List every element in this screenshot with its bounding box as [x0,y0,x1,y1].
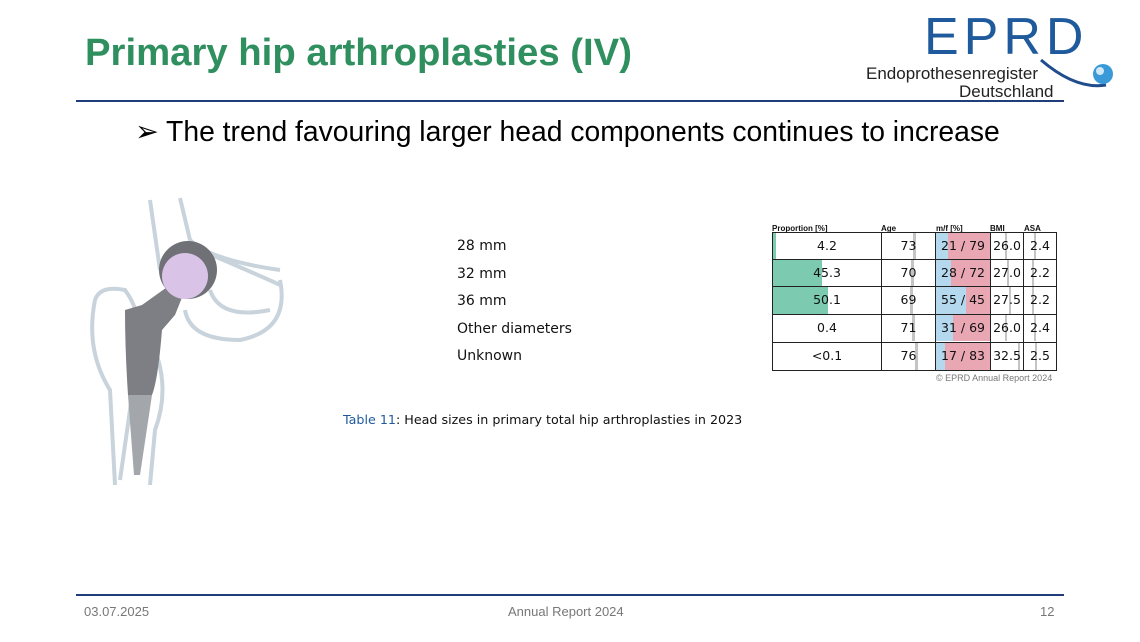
text: 36 mm [457,293,507,309]
table: 71 [901,320,916,335]
table: ASA [1024,224,1041,233]
footer: 12 [1040,604,1054,619]
table: 45.3 [813,265,841,280]
table: 2.2 [1030,292,1050,307]
caption: Table 11: Head sizes in primary total hip arthroplasties in 2023 [343,412,742,427]
table: 73 [901,238,916,253]
table: 4.2 [817,238,837,253]
table: 32.5 [993,348,1021,363]
footer rule [76,594,1064,596]
text: 32 mm [457,266,507,282]
logo: Deutschland [959,82,1054,101]
table: 27.0 [993,265,1021,280]
text: Other diameters [457,321,572,337]
table: 50.1 [813,292,841,307]
hip implant illustration [90,198,284,486]
table: 2.5 [1030,348,1050,363]
table: 2.4 [1030,238,1050,253]
footer: 03.07.2025 [84,604,149,619]
row labels: 28 mm [457,238,507,254]
table [772,224,1057,383]
table: 26.0 [993,320,1021,335]
table: 21 / 79 [941,238,985,253]
table: 76 [901,348,916,363]
table: 2.4 [1030,320,1050,335]
table: BMI [990,224,1005,233]
table: © EPRD Annual Report 2024 [936,373,1052,383]
table: 2.2 [1030,265,1050,280]
logo: Endoprothesenregister [866,64,1038,83]
text: Unknown [457,348,522,364]
table: 0.4 [817,320,837,335]
header rule [76,100,1064,102]
table: 27.5 [993,292,1021,307]
table: Proportion [%] [772,224,828,233]
table: <0.1 [812,348,842,363]
table: m/f [%] [936,224,963,233]
footer [84,604,1054,619]
bullet text: ➢ The trend favouring larger head components continues to increase [135,115,1000,147]
table: 28 / 72 [941,265,985,280]
table: 70 [901,265,916,280]
table: Age [881,224,896,233]
logo [866,8,1113,101]
footer: Annual Report 2024 [508,604,624,619]
title: Primary hip arthroplasties (IV) [85,31,632,74]
table: 26.0 [993,238,1021,253]
table: 55 / 45 [941,292,985,307]
table: 17 / 83 [941,348,985,363]
table: 69 [901,292,916,307]
logo: EPRD [924,8,1088,66]
table: 31 / 69 [941,320,985,335]
